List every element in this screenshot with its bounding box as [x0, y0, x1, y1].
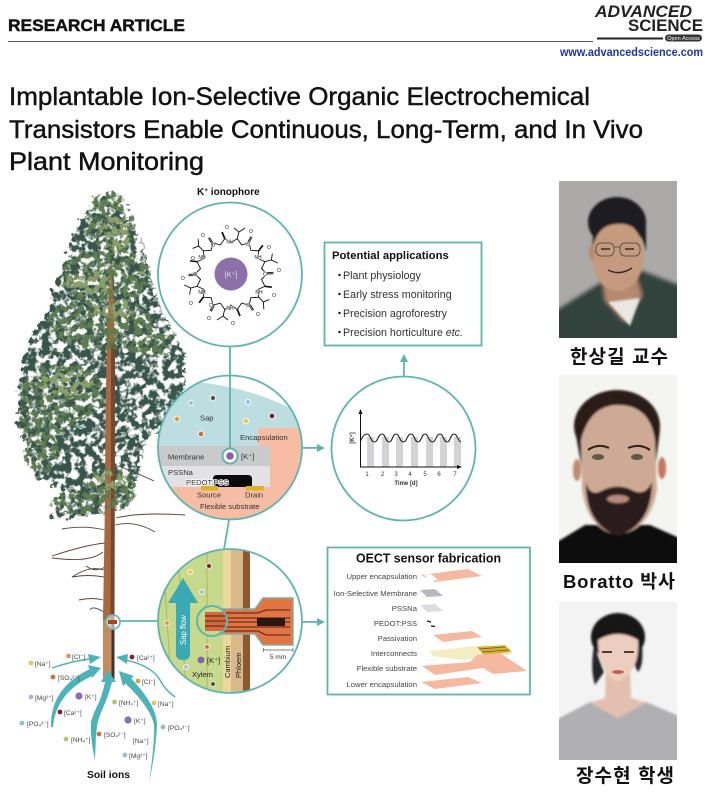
ion labels: [PO₄³⁻]	[27, 721, 49, 728]
atoms: O	[267, 245, 271, 251]
shirt	[559, 523, 677, 563]
interconnect layer	[429, 645, 515, 660]
applications list: Precision horticulture etc.	[343, 327, 463, 339]
foliage shadow layer	[18, 194, 186, 518]
atoms: O	[263, 272, 267, 278]
axis labels: 2	[381, 472, 385, 478]
xylem vessel lines	[163, 549, 207, 695]
applications list: Early stress monitoring	[343, 289, 452, 301]
soil ions label: Soil ions	[87, 770, 130, 781]
name: professor: 한상길 교수	[570, 346, 668, 368]
photo: postdoc	[559, 375, 677, 563]
section labels	[168, 414, 288, 511]
title	[9, 83, 643, 176]
section labels: [K⁺]	[241, 452, 254, 461]
ion labels: [Na⁺]	[35, 661, 51, 668]
xylem labels: Phloem	[234, 653, 243, 678]
arrow to time chart	[303, 444, 325, 452]
ion labels: [Ca²⁺]	[137, 655, 155, 662]
K+ ionophore heading: +	[204, 187, 208, 194]
arrow right wide	[119, 671, 157, 783]
journal url: www.advancedscience.com	[559, 47, 703, 59]
header rule	[8, 41, 593, 42]
layer labels: Interconnects	[371, 649, 417, 658]
xylem labels	[192, 646, 243, 679]
ion labels: [K⁺]	[85, 694, 97, 701]
xylem ions	[164, 564, 216, 686]
atoms: O	[201, 233, 205, 239]
atoms: O	[249, 229, 253, 235]
scale bar	[264, 648, 293, 661]
layer labels: Upper encapsulation	[346, 572, 417, 581]
brows and eyes	[588, 446, 650, 450]
title: Plant Monitoring	[9, 148, 204, 176]
axes	[358, 409, 462, 469]
section labels: Encapsulation	[240, 433, 288, 442]
lower lip	[607, 495, 629, 503]
sap	[159, 382, 298, 446]
molecule ring	[181, 228, 281, 320]
sap ions	[174, 395, 275, 437]
foliage mid green layer	[19, 192, 174, 516]
K+ ionophore heading: ionophore	[208, 187, 260, 198]
name: postdoc: Boratto 박사	[563, 571, 675, 592]
face	[592, 221, 644, 291]
axis labels: 6	[437, 472, 441, 478]
circle: sensor in xylem	[157, 549, 303, 695]
photo: professor	[559, 181, 677, 338]
section labels: PSSNa	[168, 468, 194, 477]
ion labels: [SO₄²⁻]	[104, 732, 126, 739]
hair	[572, 388, 662, 438]
ion labels: [Na⁺]	[158, 701, 174, 708]
face	[598, 634, 638, 682]
gray bars	[367, 437, 461, 467]
atoms: O	[277, 268, 281, 274]
journal logo: ADVANCED	[594, 2, 692, 21]
circle: ionophore	[158, 202, 302, 346]
atoms: O	[231, 321, 235, 327]
glasses	[596, 243, 640, 256]
fabrication heading: OECT sensor fabrication	[356, 552, 501, 566]
atoms: O	[246, 242, 250, 248]
pedot	[213, 475, 252, 487]
lower dead branches	[52, 466, 185, 612]
ion labels: [Ca²⁺]	[64, 710, 82, 717]
trunk zoom marker	[106, 615, 120, 629]
applications list: Precision agroforestry	[343, 308, 448, 320]
pssna layer	[157, 466, 270, 487]
axis labels: 4	[408, 472, 412, 478]
scale bar: 5 mm	[270, 654, 286, 661]
header: research article: RESEARCH ARTICLE	[8, 17, 185, 35]
face	[581, 405, 657, 535]
layer labels: Flexible substrate	[357, 664, 417, 673]
atoms	[181, 225, 281, 327]
arrow left wide	[51, 665, 101, 727]
potassium ion: [K⁺]	[225, 272, 237, 279]
atoms: O	[189, 301, 193, 307]
ion labels	[27, 654, 190, 760]
arrow centre	[91, 670, 116, 760]
pedot layer	[427, 621, 435, 626]
axis labels: 7	[453, 472, 457, 478]
phloem	[231, 549, 243, 695]
axis labels	[349, 432, 457, 487]
section labels: Sap	[200, 414, 214, 422]
section labels: PEDOT:PSS	[186, 478, 229, 487]
xylem	[157, 549, 223, 695]
atoms: O	[209, 303, 213, 309]
ion dots	[20, 654, 165, 757]
axis labels: [K⁺]	[349, 432, 356, 444]
ion labels: [SO₄²⁻]	[58, 675, 80, 682]
passivation layer	[433, 631, 482, 642]
atoms: O	[211, 243, 215, 249]
axis labels: 1	[365, 472, 369, 478]
root trunk	[103, 620, 114, 680]
membrane layer	[420, 589, 443, 597]
hair	[591, 613, 645, 661]
atoms: O	[256, 312, 260, 318]
ion labels: [NH₄⁺]	[71, 737, 91, 744]
arrow to fabrication	[303, 618, 325, 626]
arrow to applications	[400, 354, 408, 376]
layer labels: PEDOT:PSS	[374, 619, 417, 628]
atoms: O	[193, 272, 197, 278]
layer labels	[334, 572, 418, 689]
title: Implantable Ion-Selective Organic Electrochemical	[9, 83, 590, 111]
drain	[246, 486, 264, 490]
connector to ion	[229, 375, 231, 449]
atoms: O	[181, 276, 185, 282]
pine tree	[18, 192, 186, 680]
sweater	[559, 701, 677, 760]
arrow right thin	[116, 654, 175, 697]
layer labels: Passivation	[378, 634, 417, 643]
atoms: O	[272, 293, 276, 299]
xylem labels: Xylem	[192, 670, 213, 679]
ion labels: [NH₄⁺]	[119, 700, 139, 707]
title: Transistors Enable Continuous, Long-Term, and In Vivo	[9, 116, 643, 144]
source	[201, 486, 218, 490]
wave line	[360, 434, 461, 442]
section labels: Drain	[245, 490, 263, 500]
soil ions	[20, 654, 190, 760]
flexible substrate layer	[422, 653, 527, 675]
central k ion	[222, 448, 238, 464]
shirt	[559, 268, 677, 338]
atoms: NH	[254, 255, 262, 261]
trunk shadow	[110, 340, 115, 622]
ion labels: [Na⁺]	[133, 738, 149, 745]
journal logo: Open Access	[667, 36, 700, 42]
soil ion arrows	[51, 654, 175, 783]
eyes and lips	[602, 651, 634, 653]
journal logo: SCIENCE	[628, 16, 703, 35]
axis labels: Time [d]	[394, 481, 418, 487]
journal logo	[594, 2, 703, 42]
atoms: NH	[198, 255, 206, 261]
photo: student	[559, 602, 677, 760]
neck	[602, 270, 642, 322]
sensor inset ring	[197, 606, 230, 636]
eyes and mouth	[601, 249, 634, 273]
section labels: Flexible substrate	[200, 502, 260, 511]
atoms: O	[225, 225, 229, 231]
potassium ion	[214, 258, 248, 290]
ear	[589, 244, 595, 260]
atoms: NH	[226, 240, 234, 246]
panel: OECT sensor fabrication	[328, 548, 530, 694]
ion labels: [Cl⁻]	[72, 654, 86, 661]
section labels: Membrane	[168, 452, 204, 462]
layer labels: PSSNa	[392, 604, 418, 613]
axis labels: 3	[394, 472, 398, 478]
name: student: 장수현 학생	[576, 765, 674, 787]
ion labels: [PO₄³⁻]	[168, 725, 190, 732]
cambium	[223, 549, 231, 695]
axis labels: 5	[423, 472, 427, 478]
lower encapsulation layer	[421, 677, 482, 689]
trunk dark edge	[112, 622, 114, 680]
connector lines	[120, 346, 230, 621]
bark	[243, 549, 250, 695]
panel: potential applications	[324, 242, 482, 346]
pssna layer	[420, 604, 443, 612]
arrow left thin	[52, 654, 101, 668]
atoms: O	[246, 303, 250, 309]
layer labels: Lower encapsulation	[346, 680, 417, 689]
trunk	[103, 265, 115, 620]
applications heading: Potential applications	[332, 250, 449, 262]
ion labels: [Mg²⁺]	[129, 753, 148, 760]
ion labels: [Mg²⁺]	[35, 695, 54, 702]
membrane layer	[157, 446, 270, 466]
sensor strip	[205, 598, 293, 645]
neck	[590, 670, 646, 718]
atoms: O	[191, 256, 195, 262]
circle: sensor cross-section	[157, 375, 303, 521]
circle: time chart	[332, 376, 476, 520]
beard	[586, 482, 652, 536]
hair sides	[575, 430, 660, 470]
xylem labels: [K⁺]	[207, 656, 220, 665]
section labels: Source	[197, 490, 221, 500]
upper encapsulation layer	[421, 569, 482, 582]
white tee	[608, 298, 640, 326]
sap flow arrow	[168, 578, 198, 660]
applications list: Plant physiology	[343, 270, 421, 282]
atoms: O	[207, 316, 211, 322]
ion labels: [Cl⁻]	[142, 679, 156, 686]
encapsulation	[171, 428, 302, 519]
applications list	[338, 270, 463, 339]
atoms: NH	[226, 306, 234, 312]
foliage light tips	[42, 217, 137, 491]
xylem labels: Cambium	[223, 646, 232, 678]
ears	[573, 459, 581, 481]
atoms: NH	[255, 290, 263, 296]
atoms: NH	[198, 290, 206, 296]
layer labels: Ion-Selective Membrane	[334, 589, 417, 598]
hair	[586, 196, 648, 238]
ion labels: [K⁺]	[134, 718, 146, 725]
K+ ionophore heading: K	[197, 187, 204, 198]
sap flow label: Sap flow	[179, 615, 188, 645]
